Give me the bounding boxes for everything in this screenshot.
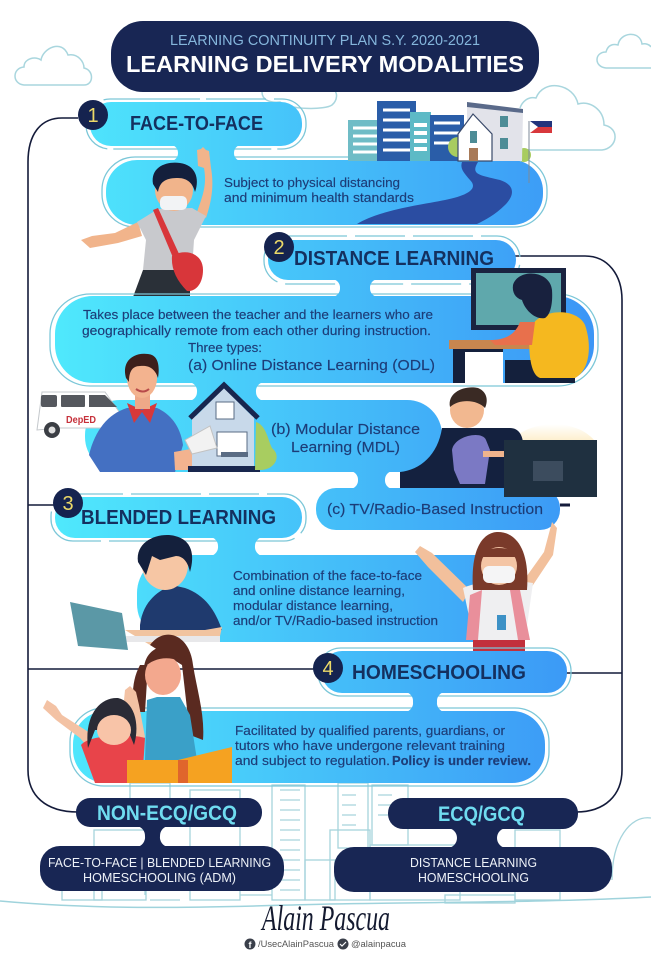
description: homeschooling: and subject to regulation. [235,754,390,768]
background clouds [15,34,651,150]
description: blended learning [233,569,438,628]
description: face-to-face [224,176,414,205]
title banner [111,21,539,92]
illustration: house [185,385,277,472]
heading: non-ecq/gcq: NON-ECQ/GCQ [97,802,237,825]
type: tv radio instruction: (c) TV/Radio-Based Instruction [327,501,543,518]
description: distance learning: Three types: [188,341,262,355]
background city skyline outline [62,783,651,903]
description: homeschooling: tutors who have undergone relevant training [235,739,505,753]
flag [529,121,552,183]
heading: face-to-face: FACE-TO-FACE [130,113,263,135]
badge 4 [313,653,343,683]
illustration: student with laptop [70,535,222,650]
ground line [0,897,651,907]
description: blended learning: Combination of the face-to-face [233,569,422,583]
badge 1: 1 [87,105,99,127]
panel: distance learning [50,236,598,530]
list: ecq/gcq modalities [410,856,537,885]
list: non-ecq/gcq modalities: FACE-TO-FACE | BLENDED LEARNING [48,856,271,870]
description: blended learning: modular distance learning, [233,599,393,613]
heading: distance learning: DISTANCE LEARNING [294,248,494,270]
illustration: student at computer [449,268,589,383]
title eyebrow: LEARNING CONTINUITY PLAN S.Y. 2020-2021 [170,32,480,49]
signature: Alain Pascua [261,898,390,938]
icon: twitter [338,938,348,950]
list: non-ecq/gcq modalities: HOMESCHOOLING (ADM) [83,871,236,885]
panel: homeschooling [70,648,571,786]
badge 3 [53,488,83,518]
badge 2 [264,232,294,262]
badge 2: 2 [273,237,285,259]
badge 4: 4 [322,658,334,680]
list: ecq/gcq modalities: HOMESCHOOLING [418,871,529,885]
illustration: girl with mask [415,522,557,653]
icon: facebook: f [248,940,252,950]
badge 3: 3 [62,493,74,515]
panel: non-ecq/gcq [40,798,284,891]
description: homeschooling: Policy is under review. [392,754,531,768]
description: blended learning: and/or TV/Radio-based instruction [233,614,438,628]
description: blended learning: and online distance learning, [233,584,405,598]
description: distance learning [82,308,433,355]
list: ecq/gcq modalities: DISTANCE LEARNING [410,856,537,870]
social handles [244,938,406,950]
icon: facebook [244,938,256,950]
facebook handle: /UsecAlainPascua [258,939,334,949]
panel: ecq/gcq [334,798,612,892]
type: modular distance learning [271,421,420,456]
description: homeschooling: Facilitated by qualified parents, guardians, or [235,724,505,738]
deped logo: DepED [66,415,96,426]
step number badges [53,100,343,683]
description: homeschooling [235,724,531,768]
description: face-to-face: Subject to physical distancing [224,176,400,190]
illustration: deped van [37,392,125,438]
heading: homeschooling: HOMESCHOOLING [352,662,526,684]
type: modular distance learning: Learning (MDL) [291,439,400,456]
heading: blended learning: BLENDED LEARNING [81,507,276,529]
description: distance learning: Takes place between the teacher and the learners who are [83,308,433,322]
illustration: city, school and road [348,101,552,224]
description: distance learning: geographically remote from each other during instruction. [82,324,431,338]
type: modular distance learning: (b) Modular Distance [271,421,420,438]
panel: face-to-face [86,99,547,227]
connector lines [28,118,622,812]
description: face-to-face: and minimum health standards [224,191,414,205]
illustration: teacher delivering modules [89,354,214,472]
list: non-ecq/gcq modalities [48,856,271,885]
badge 1 [78,100,108,130]
illustration: child watching tv on couch [400,387,597,497]
illustration: student waving with bag [81,147,212,297]
twitter handle: @alainpacua [351,939,406,949]
main title: LEARNING DELIVERY MODALITIES [126,51,524,77]
illustration: parent and child with box [43,635,232,783]
panel: blended learning [51,494,523,642]
heading: ecq/gcq: ECQ/GCQ [438,803,525,826]
type: online distance learning: (a) Online Distance Learning (ODL) [188,357,435,374]
